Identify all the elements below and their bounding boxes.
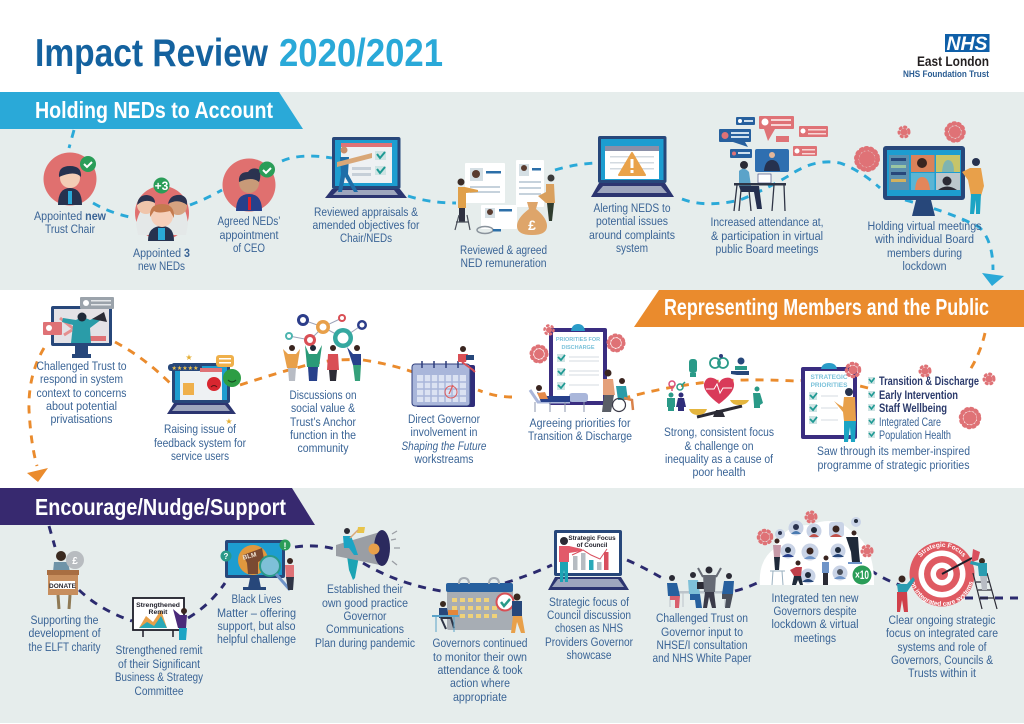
icon: ten new Governors cloud: ×10	[855, 568, 869, 582]
icon: strengthened remit board	[133, 598, 187, 640]
text: Saw through its member-inspired programme: Saw through its member-inspired	[817, 444, 970, 458]
icon: ten new Governors cloud	[758, 512, 874, 585]
text: Challenged Trust to respond: privatisations	[50, 412, 112, 426]
checklist: strategic priorities: Integrated Care	[879, 417, 941, 429]
heading banner: Holding NEDs to Account	[0, 92, 303, 129]
checklist: strategic priorities: Population Health	[879, 430, 951, 442]
text: Strategic focus of Council: showcase	[566, 648, 612, 662]
NHS logo: NHS Foundation Trust	[903, 69, 989, 79]
text: Integrated ten new Governors: Integrated ten new	[772, 591, 859, 605]
text: Direct Governor involvement: Shaping the Future	[402, 439, 487, 453]
panel: Encourage/Nudge/Support	[0, 488, 1018, 704]
icon: Black Lives Matter monitor: BLM	[242, 551, 257, 562]
text: Challenged Trust on Governor input: Governor input to	[661, 625, 743, 639]
text: Clear ongoing strategic focus: Clear ongoing strategic	[888, 613, 996, 627]
heading banner: Encourage/Nudge/Support	[0, 488, 315, 525]
text: Holding virtual meetings: Holding virtual meetings	[868, 219, 982, 233]
icon: attendance calendar and governors	[432, 578, 525, 633]
text: Strong consistent focus: poor health	[692, 465, 746, 479]
icon: governors round table	[667, 566, 734, 608]
text: Established their own good practice	[315, 582, 415, 650]
text: Agreed NEDs' appointment of CEO: Agreed NEDs’	[218, 214, 280, 228]
text: Holding virtual meetings: members during	[887, 246, 962, 260]
text: Challenged Trust on Governor input: NHSE/I consultation	[656, 638, 748, 652]
icon: strategic priorities clipboard	[801, 363, 994, 442]
text: Agreeing priorities	[528, 416, 632, 443]
text: Black Lives Matter: support, but also	[218, 619, 296, 633]
icon: Black Lives Matter monitor: ?	[224, 552, 229, 561]
text: Clear ongoing strategic focus: focus on integrated care	[886, 626, 998, 640]
text: Black Lives Matter: Matter – offering	[217, 606, 296, 620]
text: Direct Governor involvement: workstreams	[414, 452, 474, 466]
icon: strategic focus target: Strategic Focus	[918, 542, 966, 557]
text: Clear ongoing strategic focus: Governors, Councils &	[891, 653, 993, 667]
text: Strategic focus of Council: chosen as NHS	[555, 621, 623, 635]
text: Discussions on social value: function in the	[290, 428, 356, 442]
text: Reviewed and agreed NED remuneration: Reviewed & agreed	[460, 243, 547, 257]
text: Holding virtual meetings: with individual Board	[874, 232, 974, 246]
NHS logo	[903, 33, 990, 79]
text: Direct Governor involvement: Direct Governor	[408, 412, 480, 426]
text: Challenged Trust to respond	[36, 359, 127, 426]
checklist: strategic priorities: Early Intervention	[879, 390, 958, 402]
text: Discussions on social value: community	[298, 441, 349, 455]
icon: megaphone	[336, 527, 400, 580]
text: Discussions on social value: Trust’s Anchor	[290, 415, 356, 429]
text: Direct Governor involvement: involvement in	[410, 425, 478, 439]
text: Appointed new Trust Chair	[34, 209, 106, 236]
text: Established their own good practice: Communications	[326, 622, 404, 636]
text: Increased attendance	[710, 215, 824, 256]
NHS logo: East London	[917, 54, 989, 69]
icon: strategic focus target: on integrated care systems	[912, 582, 973, 606]
text: Reviewed appraisals: amended objectives for	[312, 218, 420, 232]
text: Reviewed appraisals: Reviewed appraisals &	[314, 205, 418, 219]
text: Appointed new Trust Chair: Appointed new	[34, 209, 106, 223]
text: Agreeing priorities: Agreeing priorities for	[530, 416, 630, 430]
text: Black Lives Matter: helpful challenge	[217, 632, 296, 646]
text: Increased attendance: Increased attendance at,	[710, 215, 824, 229]
text: Discussions on social value	[290, 388, 356, 455]
dashed route line, section 3	[49, 526, 1024, 621]
title: 2020/2021	[279, 32, 443, 75]
text: Direct Governor involvement	[402, 412, 487, 466]
text: Established their own good practice: Plan during pandemic	[315, 636, 415, 650]
text: Holding virtual meetings	[868, 219, 982, 273]
text: Alerting NEDS	[589, 201, 675, 255]
text: Agreed NEDs' appointment of CEO: appointment	[220, 228, 279, 242]
text: Governors continued to monitor: attendance & took	[438, 663, 523, 677]
text: Appointed new Trust Chair: Trust Chair	[45, 222, 95, 236]
text: Raising issue of feedback: service users	[171, 449, 229, 463]
text: Strategic focus of Council	[545, 595, 633, 662]
text: Saw through its member-inspired programme	[817, 444, 970, 472]
text: Strengthened remit: Strengthened remit	[116, 643, 203, 657]
icon: priorities for discharge clipboard	[530, 324, 633, 412]
heading banner: Holding NEDs to Account: Holding NEDs to Account	[35, 97, 273, 123]
text: Governors continued to monitor: Governors continued	[432, 636, 528, 650]
icon: Black Lives Matter monitor	[220, 540, 294, 590]
text: Integrated ten new Governors: lockdown & virtual	[772, 617, 858, 631]
text: Raising issue of feedback: Raising issue of	[164, 422, 237, 436]
icon: laptop Strategic Focus of Council: of Council	[577, 542, 608, 549]
text: Reviewed appraisals	[312, 205, 420, 245]
dashed route line, section 1	[69, 130, 1004, 286]
icon: priorities for discharge clipboard: PRIORITIES FOR	[556, 337, 600, 343]
icon: CVs and money bag	[455, 160, 555, 235]
heading banner: Representing Members and the Public	[634, 290, 1024, 327]
icon: strengthened remit board: Remit	[149, 609, 168, 616]
text: Strong consistent focus	[664, 425, 774, 479]
icon: strategic priorities clipboard: PRIORITIES	[811, 382, 848, 389]
text: Integrated ten new Governors	[772, 591, 859, 645]
dashed route line, section 2	[27, 333, 985, 482]
text: Raising issue of feedback	[154, 422, 246, 463]
text: Holding virtual meetings: lockdown	[902, 259, 946, 273]
icon: donate box: DONATE	[49, 583, 77, 590]
text: Increased attendance: & participation in virtual	[711, 229, 823, 243]
icon: priorities for discharge clipboard: DISCHARGE	[561, 345, 595, 351]
panel: Representing Members and the Public	[27, 290, 1024, 482]
heading banner: Encourage/Nudge/Support: Encourage/Nudge/Support	[35, 494, 286, 520]
text: Supporting the ELFT charity: Supporting the	[30, 613, 99, 627]
text: Governors continued to monitor: action where	[450, 676, 510, 690]
icon: laptop feedback system	[167, 353, 241, 426]
text: Alerting NEDS: around complaints	[589, 228, 675, 242]
icon: Black Lives Matter monitor: !	[284, 541, 286, 551]
text: Challenged Trust on Governor input: and NHS White Paper	[652, 651, 752, 665]
icon: monitor with megaphone speaker	[43, 297, 114, 358]
text: Strengthened remit: of their Significant	[118, 657, 201, 671]
text: Integrated ten new Governors: Governors despite	[774, 604, 857, 618]
icon: new CEO	[222, 158, 276, 212]
text: Established their own good practice: Governor	[344, 609, 386, 623]
icon: community network with people	[283, 314, 367, 381]
icon: laptop with appraisals	[325, 137, 407, 198]
icon: laptop Strategic Focus of Council: Strategic Focus	[568, 535, 616, 542]
title: Impact Review	[35, 32, 269, 75]
icon: laptop feedback system: ★	[225, 417, 233, 426]
text: Challenged Trust to respond: about potential	[46, 399, 117, 413]
icon: CVs and money bag: £	[528, 217, 536, 233]
text: Appointed 3 new NEDs: new NEDs	[138, 259, 185, 273]
text: Strengthened remit: Committee	[134, 684, 184, 698]
icon: laptop with warning	[591, 136, 674, 197]
text: Appointed 3 new NEDs	[133, 246, 190, 273]
text: Strategic focus of Council: Providers Governor	[545, 635, 633, 649]
checklist: strategic priorities: Staff Wellbeing	[879, 403, 947, 415]
text: Saw through its member-inspired programme: programme of strategic priorities	[818, 458, 970, 472]
text: Strengthened remit: Business & Strategy	[115, 670, 204, 684]
text: Challenged Trust on Governor input: Challenged Trust on	[656, 611, 748, 625]
text: Agreeing priorities: Transition & Discharge	[528, 429, 632, 443]
text: Clear ongoing strategic focus	[886, 613, 998, 680]
text: Challenged Trust to respond: context to concerns	[36, 386, 126, 400]
title	[35, 32, 443, 75]
text: Strengthened remit	[115, 643, 204, 698]
text: Integrated ten new Governors: meetings	[794, 631, 836, 645]
NHS logo: NHS	[946, 33, 988, 55]
text: Strong consistent focus: Strong, consistent focus	[664, 425, 774, 439]
icon: laptop Strategic Focus of Council	[548, 530, 629, 590]
text: Reviewed appraisals: Chair/NEDs	[340, 231, 392, 245]
icon: laptop feedback system: ★★★★★	[172, 365, 198, 372]
icon: laptop feedback system: ★	[185, 353, 193, 362]
icon: calendar	[412, 346, 475, 407]
text: Clear ongoing strategic focus: Trusts within it	[908, 666, 977, 680]
checklist: strategic priorities: Transition & Discharge	[879, 376, 979, 388]
text: Reviewed and agreed NED remuneration	[460, 243, 547, 270]
text: Challenged Trust to respond: respond in system	[40, 372, 123, 386]
icon: donate box: £	[72, 556, 78, 567]
text: Alerting NEDS: Alerting NEDS to	[594, 201, 671, 215]
text: Governors continued to monitor	[432, 636, 528, 704]
icon: inequality scales and heart	[667, 354, 763, 417]
text: Discussions on social value: social value &	[291, 401, 355, 415]
text: Challenged Trust to respond: Challenged Trust to	[36, 359, 127, 373]
text: Supporting the ELFT charity	[28, 613, 101, 654]
checklist: strategic priorities	[868, 376, 979, 442]
text: Discussions on social value: Discussions on	[290, 388, 356, 402]
text: Governors continued to monitor: appropriate	[453, 690, 507, 704]
text: Strong consistent focus: inequality as a cause of	[665, 452, 774, 466]
text: Strong consistent focus: & challenge on	[684, 439, 754, 453]
text: Strategic focus of Council: Strategic focus of	[549, 595, 630, 609]
text: Black Lives Matter: Black Lives	[232, 592, 282, 606]
icon: three new NEDs	[135, 178, 189, 241]
text: Strategic focus of Council: Council discussion	[547, 608, 631, 622]
text: Agreed NEDs' appointment of CEO: of CEO	[233, 241, 265, 255]
icon: virtual public board meeting	[719, 116, 828, 211]
text: Appointed 3 new NEDs: Appointed 3	[133, 246, 190, 260]
icon: monitor with video call and viruses	[856, 124, 984, 216]
text: Challenged Trust on Governor input	[652, 611, 752, 665]
text: Supporting the ELFT charity: development of	[28, 626, 101, 640]
icon: three new NEDs: +3	[155, 179, 169, 193]
text: Reviewed and agreed NED remuneration: NED remuneration	[460, 256, 546, 270]
text: Established their own good practice: own good practice	[322, 596, 408, 610]
icon: strategic priorities clipboard: STRATEGIC	[810, 374, 848, 381]
text: Black Lives Matter	[217, 592, 296, 646]
icon: new Trust Chair	[44, 152, 96, 206]
icon: strategic focus target	[897, 542, 998, 612]
text: Raising issue of feedback: feedback system for	[154, 436, 246, 450]
icon: donate box	[47, 551, 84, 609]
text: Established their own good practice: Established their	[327, 582, 403, 596]
text: Supporting the ELFT charity: the ELFT charity	[28, 640, 101, 654]
text: Governors continued to monitor: to monitor their own	[433, 650, 527, 664]
text: Increased attendance: public Board meetings	[716, 242, 818, 256]
text: Alerting NEDS: system	[616, 241, 648, 255]
text: Agreed NEDs' appointment of CEO	[218, 214, 280, 255]
icon: strengthened remit board: Strengthened	[136, 602, 180, 609]
text: Alerting NEDS: potential issues	[596, 214, 668, 228]
text: Clear ongoing strategic focus: systems and role of	[898, 640, 987, 654]
panel: Holding NEDs to Account	[0, 92, 1004, 286]
